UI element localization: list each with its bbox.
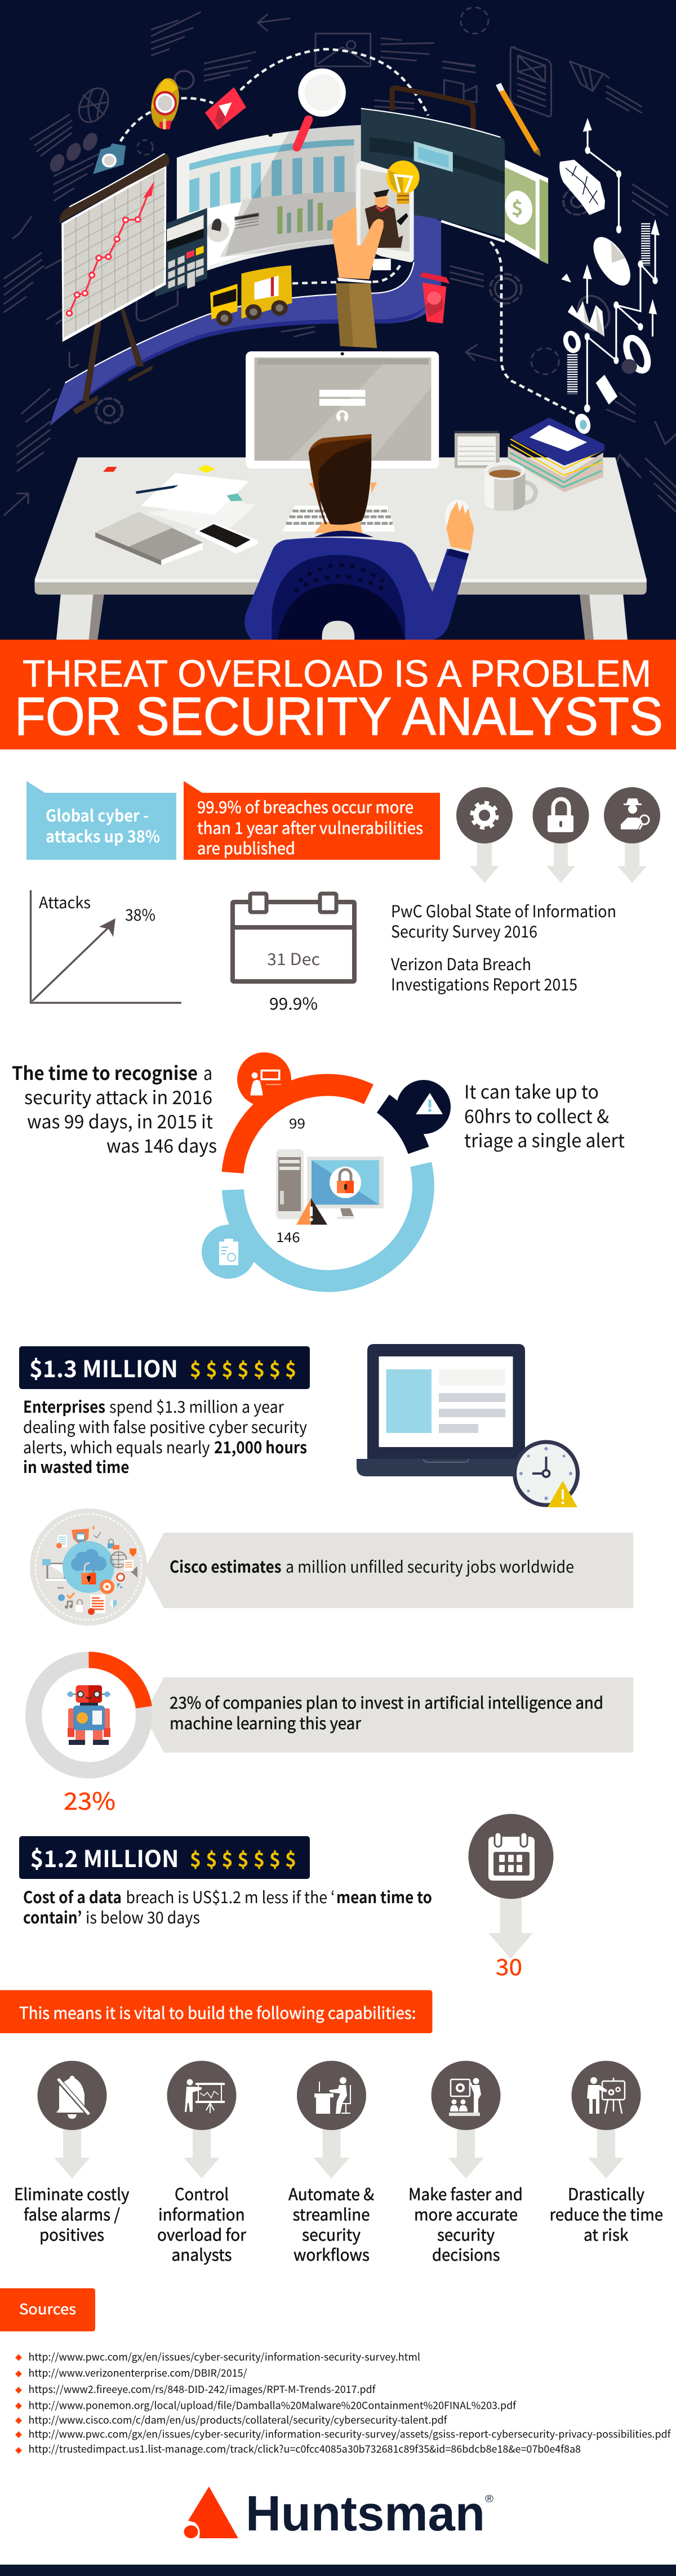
text: 60hrs triage: It can take up to	[464, 1077, 599, 1104]
capability: faster decisions: decisions	[432, 2242, 500, 2266]
text: false positive cost: dealing with false positive cyber security	[23, 1414, 307, 1438]
chair	[272, 555, 405, 640]
icon: delivery truck	[210, 265, 292, 326]
title banner	[0, 640, 676, 749]
text: cost of a data breach: mean time to	[336, 1885, 432, 1908]
heading: $1.3 million: $	[269, 1355, 281, 1382]
text: false positive cost: in wasted time	[23, 1454, 130, 1478]
icon: calendar 31 Dec	[231, 894, 356, 1015]
mouse and hand	[445, 499, 474, 551]
heading: $1.3 million: $1.3 MILLION	[29, 1350, 178, 1384]
list: source links: http://www.verizonenterprise.com/DBIR/2015/	[28, 2365, 247, 2380]
heading: $1.3 million: $	[190, 1355, 201, 1382]
text: false positive cost	[23, 1394, 307, 1478]
text: survey references: Investigations Report 2015	[391, 972, 577, 995]
icon: laptop with clock and warning	[357, 1344, 578, 1507]
callout: 99.9% of breaches: than 1 year after vulnerabilities	[197, 815, 423, 839]
capability: control information overload: information	[158, 2202, 244, 2225]
capability: eliminate false alarms: Eliminate costly	[14, 2181, 130, 2205]
ring arc: 2016 orange	[233, 1052, 368, 1172]
heading: $1.2 million: $	[237, 1845, 249, 1872]
ring arc: triage navy	[383, 1080, 451, 1150]
heading: sources: Sources	[19, 2298, 76, 2319]
text: 60hrs triage	[464, 1077, 625, 1153]
text: survey references: Verizon Data Breach	[391, 952, 531, 975]
list: source links: http://www.cisco.com/c/dam/en/us/products/collateral/security/cybersecurity-talent.pdf	[28, 2412, 448, 2427]
panel: AI investment	[144, 1677, 633, 1752]
callout: 99.9% of breaches: are published	[197, 836, 295, 859]
cloud	[71, 1549, 106, 1571]
panel: Cisco estimates	[144, 1533, 633, 1608]
orange shield	[72, 1529, 89, 1546]
capability: automate workflows: security	[302, 2222, 361, 2245]
ring diagram: days to recognise: 146	[276, 1226, 300, 1246]
capability: automate workflows	[288, 2061, 374, 2266]
heading: $1.3 million: $	[206, 1355, 217, 1382]
text: cost of a data breach: is below 30 days	[86, 1905, 200, 1928]
title banner: THREAT OVERLOAD IS A PROBLEM	[23, 652, 651, 695]
capability: reduce time at risk: Drastically	[568, 2181, 644, 2205]
callout: 99.9% of breaches: 99.9% of breaches occur more	[197, 794, 413, 818]
icon: computer tower and locked monitor	[276, 1149, 384, 1225]
heading: sources	[0, 2288, 95, 2331]
text: cost of a data breach: contain’	[23, 1905, 82, 1928]
heading: vital capabilities: This means it is vital to build the following capabilities:	[19, 2000, 416, 2024]
desk	[35, 457, 647, 640]
callout: 99.9% of breaches	[184, 781, 440, 860]
bar chart: green bars	[277, 199, 333, 234]
capability: control information overload: Control	[175, 2181, 229, 2205]
icon: faint gears	[96, 7, 615, 423]
panel: Cisco estimates: a million unfilled security jobs worldwide	[286, 1554, 574, 1578]
line chart: red trend	[66, 181, 154, 316]
keyboard	[283, 506, 395, 532]
icon: rings	[564, 332, 652, 374]
text: false positive cost: spend $1.3 million a year	[109, 1394, 284, 1418]
panel: AI investment: machine learning this year	[170, 1711, 362, 1734]
bar chart: blue bars	[189, 156, 345, 213]
icon: pencil	[499, 84, 541, 157]
text: time to recognise: security attack in 2016	[24, 1083, 212, 1110]
capability: automate workflows: streamline	[293, 2202, 370, 2225]
icon: calendar with arrow to 30	[469, 1814, 553, 1959]
icon: money	[502, 160, 548, 264]
icon: red cup	[420, 273, 450, 324]
small icons	[58, 1526, 136, 1612]
donut chart: 23%	[34, 1660, 144, 1770]
callout: attacks up 38%: Global cyber -	[46, 803, 149, 827]
desk items left	[95, 465, 258, 565]
icon: person at desk	[314, 2077, 350, 2114]
capability: reduce time at risk: reduce the time	[550, 2202, 663, 2225]
capability: faster decisions: more accurate	[414, 2202, 518, 2225]
heading: $1.2 million: $	[206, 1845, 217, 1872]
lock	[81, 1563, 96, 1584]
laptop and envelope	[42, 1559, 68, 1581]
heading: $1.3 million: $	[254, 1355, 265, 1382]
icon: calendar 31 Dec: 99.9%	[269, 991, 318, 1015]
capability: eliminate false alarms	[14, 2061, 130, 2245]
gear badge	[100, 1579, 114, 1594]
capability: faster decisions: security	[437, 2222, 495, 2245]
heading: $1.2 million: $	[269, 1845, 281, 1872]
icon: pie chart	[586, 231, 638, 291]
icon: gear with arrow	[456, 787, 513, 883]
heading: $1.3 million: $	[221, 1355, 233, 1382]
icon: muted bell	[56, 2075, 89, 2119]
capability: faster decisions	[408, 2061, 523, 2266]
icon: robot	[67, 1685, 110, 1745]
person at desk	[244, 434, 469, 640]
text: survey references: Security Survey 2016	[391, 919, 537, 943]
easel with growth chart	[59, 154, 169, 414]
icon: calculator	[155, 208, 207, 297]
icon: briefcase	[361, 88, 505, 242]
text: survey references	[391, 899, 616, 995]
heading: vital capabilities	[0, 1990, 433, 2033]
text: false positive cost: alerts, which equals nearly	[23, 1435, 210, 1458]
stat: 23%: 23%	[64, 1783, 115, 1817]
icon: brain	[559, 160, 605, 215]
icon: presenter with gears	[587, 2077, 625, 2114]
capability: reduce time at risk: at risk	[584, 2222, 629, 2245]
bullets	[15, 2354, 22, 2454]
ring arc: 2015 blue	[202, 1164, 423, 1281]
callout: attacks up 38%	[26, 781, 176, 860]
icon: mountains	[568, 301, 604, 337]
list: source links: http://www.pwc.com/gx/en/issues/cyber-security/information-security-survey.html	[28, 2349, 420, 2364]
heading: $1.3 million: $	[285, 1355, 296, 1382]
man on phone	[365, 189, 408, 248]
notepad	[455, 432, 500, 468]
chart: attacks up	[30, 890, 181, 1003]
icon: detective with arrow	[604, 787, 660, 883]
icon: video tag	[205, 87, 246, 130]
hand holding phone	[331, 160, 420, 348]
heading: $1.2 million	[19, 1836, 310, 1879]
icon: rocket	[147, 76, 183, 131]
logo: Huntsman: Huntsman	[246, 2485, 485, 2541]
list: source links	[15, 2349, 671, 2456]
chart: attacks up: Attacks	[39, 891, 91, 913]
panel: AI investment: 23% of companies plan to invest in artificial intelligence and	[170, 1690, 603, 1714]
footer bar	[0, 2564, 676, 2576]
text: cost of a data breach	[23, 1885, 432, 1928]
capability: eliminate false alarms: positives	[39, 2222, 104, 2245]
stack of books	[508, 418, 604, 492]
panel: Cisco estimates: Cisco estimates	[170, 1554, 282, 1578]
text: 60hrs triage: triage a single alert	[464, 1126, 625, 1153]
icon: money: $	[512, 193, 523, 221]
heading: $1.2 million: $	[190, 1845, 201, 1872]
logo mark	[184, 2486, 238, 2538]
text: cost of a data breach: Cost of a data	[23, 1885, 122, 1908]
text: time to recognise	[12, 1059, 217, 1158]
capability: control information overload	[157, 2061, 247, 2266]
icon: presenter with chart	[185, 2079, 225, 2113]
capability: automate workflows: Automate &	[288, 2181, 374, 2205]
text: 60hrs triage: 60hrs to collect &	[464, 1101, 609, 1128]
icon: presenter with audience	[449, 2078, 481, 2116]
list: source links: https://www2.fireeye.com/rs/848-DID-242/images/RPT-M-Trends-2017.pdf	[28, 2382, 376, 2396]
text: time to recognise: was 99 days, in 2015 it	[27, 1107, 213, 1134]
stat: 30: 30	[496, 1949, 522, 1982]
heading: $1.3 million	[19, 1346, 310, 1389]
list: source links: http://www.ponemon.org/local/upload/file/Damballa%20Malware%20Containment%20FINAL%203.pdf	[28, 2398, 517, 2412]
faint background line art	[5, 7, 676, 515]
heading: $1.2 million: $	[254, 1845, 265, 1872]
icon: calendar 31 Dec: 31 Dec	[267, 947, 320, 970]
text: survey references: PwC Global State of Information	[391, 899, 616, 922]
icon: clock	[515, 1442, 578, 1505]
capability: eliminate false alarms: false alarms /	[24, 2202, 120, 2225]
heading: $1.2 million: $	[221, 1845, 233, 1872]
capability: reduce time at risk	[550, 2061, 663, 2245]
jacket	[244, 531, 469, 640]
text: false positive cost: Enterprises	[23, 1394, 105, 1418]
desktop computer screen	[246, 351, 439, 468]
heading: $1.3 million: $	[237, 1355, 249, 1382]
ring diagram: days to recognise: 99	[289, 1113, 305, 1132]
flight path dashes	[121, 49, 579, 416]
icon: warning triangle	[548, 1481, 577, 1507]
hero illustration	[0, 0, 676, 640]
text: cost of a data breach: breach is US$1.2 m less if the ‘	[126, 1885, 335, 1908]
text: time to recognise: a	[203, 1059, 212, 1086]
icon: padlock with arrow	[533, 787, 589, 883]
coffee mug	[484, 462, 536, 511]
globe and document	[110, 1552, 137, 1578]
capability: control information overload: analysts	[171, 2242, 232, 2266]
text: time to recognise: The time to recognise	[12, 1059, 198, 1086]
capability: automate workflows: workflows	[293, 2242, 370, 2266]
icon: camera	[93, 144, 126, 174]
capability: control information overload: overload for	[157, 2222, 247, 2245]
documents	[56, 1535, 105, 1615]
heading: $1.2 million: $	[285, 1845, 296, 1872]
chart: attacks up: 38%	[125, 903, 155, 926]
monitor with dashboard	[177, 125, 369, 283]
list: source links: http://trustedimpact.us1.list-manage.com/track/click?u=c0fcc4085a30b732681c89f35&id=86bdcb8e18&e=07b0e4f8a8	[28, 2441, 581, 2456]
icon: faint globe	[73, 83, 114, 127]
icon: light bulb	[386, 160, 420, 204]
list: source links: http://www.pwc.com/gx/en/issues/cyber-security/information-security-survey/assets/gsiss-report-cybersecurity-privacy-possibilities.pdf	[28, 2427, 671, 2441]
icon: magnifier	[297, 68, 346, 148]
heading: $1.2 million: $1.2 MILLION	[30, 1840, 179, 1874]
icon: cloud security collage	[30, 1508, 147, 1626]
icon: hatch bars	[572, 223, 646, 394]
white data icons	[559, 118, 660, 435]
ring diagram: days to recognise	[202, 1052, 451, 1281]
text: time to recognise: was 146 days	[106, 1131, 217, 1158]
icon: faint dots	[47, 131, 100, 174]
text: false positive cost: 21,000 hours	[214, 1435, 307, 1458]
capability: faster decisions: Make faster and	[408, 2181, 523, 2205]
callout: attacks up 38%: attacks up 38%	[46, 824, 160, 847]
blue swoosh band	[50, 215, 441, 426]
logo: Huntsman: ®	[485, 2493, 493, 2504]
